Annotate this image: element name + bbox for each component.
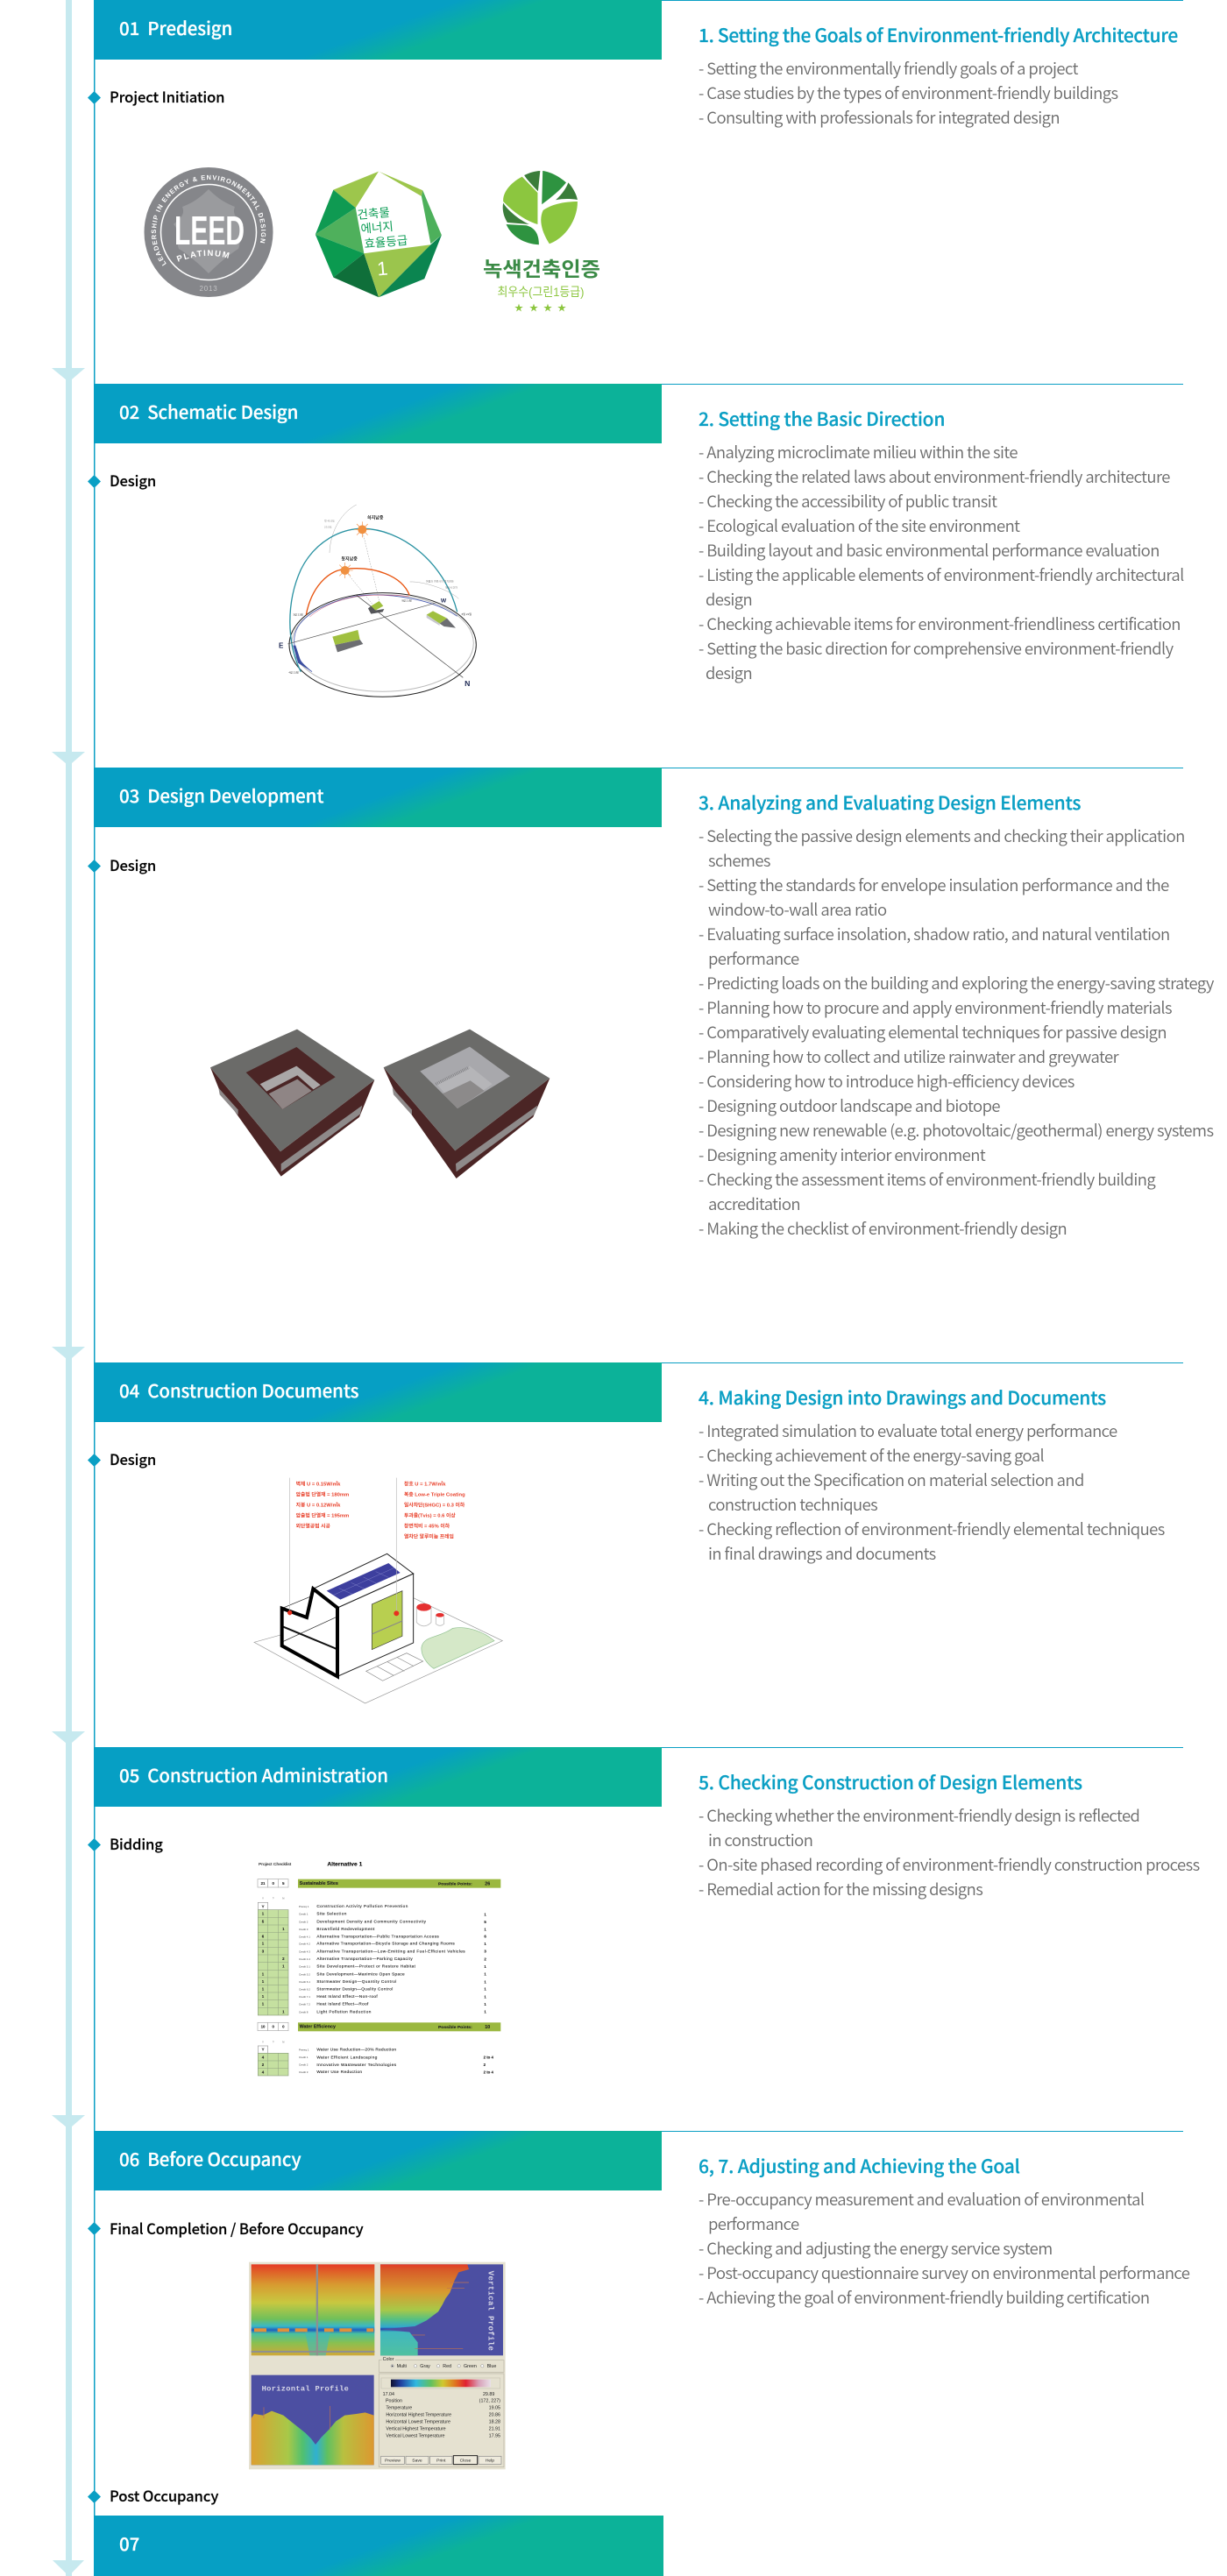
chart: thermal profile analysis screenshot: 20.86 xyxy=(489,2412,500,2417)
text block: step 1 items: - Setting the environmentally friendly goals of a project xyxy=(699,57,1078,80)
label: Bidding: Bidding xyxy=(110,1833,163,1854)
chart: project checklist table: 1 xyxy=(282,2009,285,2013)
icon: building massing models xyxy=(210,1029,550,1178)
chart: project checklist table: Alternative 1 xyxy=(327,1862,363,1868)
header: 02 Schematic Design: 02 Schematic Design xyxy=(119,398,298,424)
chart: thermal profile analysis screenshot: Vertical Lowest Temperature xyxy=(386,2433,444,2438)
header: 05 Construction Administration xyxy=(94,1747,662,1807)
header: 06 Before Occupancy: 06 Before Occupancy xyxy=(119,2145,301,2171)
chart: project checklist table: 10 xyxy=(485,2025,490,2030)
heading: step 2: 2. Setting the Basic Direction xyxy=(699,406,945,432)
chart: project checklist table: 1 xyxy=(484,1972,486,1977)
text block: step 5 items: - Remedial action for the missing designs xyxy=(699,1878,982,1900)
chart: project checklist table: 2 xyxy=(262,2063,265,2067)
icon: LEED Platinum badge: PLATINUM xyxy=(176,250,230,262)
chart: thermal profile analysis screenshot: Print xyxy=(436,2459,446,2464)
chart: project checklist table: 1 xyxy=(262,1994,265,1999)
icon: building energy efficiency grade badge: 에너지 xyxy=(360,220,394,236)
label: Project Initiation: Project Initiation xyxy=(110,86,224,107)
chart: project checklist table: Project Checklist xyxy=(259,1862,292,1867)
chart: thermal profile analysis screenshot: Horizontal Lowest Temperature xyxy=(386,2419,450,2424)
text block: step 3 items: - Checking the assessment items of environment-friendly building xyxy=(699,1168,1155,1191)
chart: house envelope isometric diagram: 창면적비 = 45% 이하 xyxy=(404,1522,450,1529)
chart: project checklist table: Stormwater Design—Quality Control xyxy=(316,1987,393,1992)
chart: project checklist table: 4 xyxy=(262,2070,265,2074)
chart: project checklist table: Credit 4.3 xyxy=(299,1950,310,1953)
text block: step 4 items xyxy=(699,1419,1165,1565)
text block: step 2 items: - Checking the accessibility of public transit xyxy=(699,490,996,513)
text block: step 3 items: - Designing amenity interior environment xyxy=(699,1143,985,1166)
chart: sun path diagram: 동지남중 xyxy=(341,556,358,562)
chart: thermal profile analysis screenshot: Temperature xyxy=(386,2405,412,2410)
chart: project checklist table: 1 xyxy=(484,2009,486,2013)
text block: step 2 items: design xyxy=(706,662,752,684)
text block: step 3 items: - Setting the standards for envelope insulation performance and the xyxy=(699,874,1169,896)
chart: project checklist table: 1 xyxy=(262,1942,265,1946)
text block: step 2 items: design xyxy=(706,588,752,611)
chart: project checklist table: 1 xyxy=(282,1927,285,1931)
text block: steps 6 and 7 items: - Achieving the goal of environment-friendly building certification xyxy=(699,2286,1150,2309)
chart: project checklist table: Alternative Transportation—Parking Capacity xyxy=(316,1957,413,1961)
chart: project checklist table: 2 to 4 xyxy=(484,2055,494,2059)
heading: steps 6 and 7: 6, 7. Adjusting and Achieving the Goal xyxy=(699,2153,1020,2179)
icon: green building certification logo xyxy=(483,171,600,314)
chart: project checklist table: 1 xyxy=(484,1912,486,1916)
text block: step 4 items: - Checking reflection of environment-friendly elemental techniques xyxy=(699,1518,1165,1540)
chart: project checklist table: Credit 1 xyxy=(299,2056,309,2059)
text block: step 3 items: performance xyxy=(708,947,799,970)
heading: step 3: 3. Analyzing and Evaluating Design Elements xyxy=(699,789,1081,816)
chart: thermal profile analysis screenshot: Vertical Highest Temperature xyxy=(386,2426,446,2431)
panel: section 06 Before Occupancy xyxy=(88,2131,1190,2506)
chart: project checklist table: 4 xyxy=(262,2055,265,2059)
chart: project checklist table: 1 xyxy=(484,1979,486,1984)
chart: project checklist table: Y xyxy=(261,1904,265,1908)
chart: house envelope isometric diagram: 압출법 단열재 = 180mm xyxy=(296,1490,349,1497)
chart: project checklist table: Credit 4.1 xyxy=(299,1935,310,1938)
chart: sun path diagram xyxy=(279,505,477,697)
text block: step 4 items: construction techniques xyxy=(708,1493,877,1516)
chart: thermal profile analysis screenshot: Green xyxy=(464,2364,477,2369)
panel: section 05 Construction Administration xyxy=(88,1747,1200,2077)
timeline stripe with arrows xyxy=(52,0,95,2576)
header: 05 Construction Administration: 05 Construction Administration xyxy=(119,1761,388,1787)
chart: project checklist table: 1 xyxy=(262,1912,265,1916)
chart: project checklist table: 10 xyxy=(261,2025,266,2029)
text block: step 3 items: - Comparatively evaluating elemental techniques for passive design xyxy=(699,1021,1167,1044)
text block: steps 6 and 7 items xyxy=(699,2188,1190,2309)
label: Post Occupancy: Post Occupancy xyxy=(110,2485,218,2506)
label: Design: Design xyxy=(110,470,156,491)
text block: step 5 items: in construction xyxy=(708,1829,812,1851)
heading: step 4: 4. Making Design into Drawings and Documents xyxy=(699,1384,1106,1411)
header: 06 Before Occupancy xyxy=(94,2131,662,2190)
text block: steps 6 and 7 items: - Checking and adjusting the energy service system xyxy=(699,2237,1053,2260)
icon: LEED Platinum badge: LEADERSHIP IN ENERGY & ENVIRONMENTAL DESIGN xyxy=(151,175,266,266)
chart: project checklist table: Site Selection xyxy=(316,1912,347,1916)
chart: project checklist table: Heat Island Effect—Roof xyxy=(316,2002,369,2006)
chart: sun path diagram: 일사시간차 xyxy=(445,584,457,589)
text block: step 4 items: - Integrated simulation to evaluate total energy performance xyxy=(699,1419,1117,1442)
header: 03 Design Development xyxy=(94,768,662,827)
chart: project checklist table: Alternative Transportation—Low-Emitting and Fuel-Efficient Vehicles xyxy=(316,1949,465,1953)
icon: green building certification logo: 최우수(그린1등급) xyxy=(498,285,584,299)
header: 04 Construction Documents xyxy=(94,1362,662,1422)
chart: project checklist table: Water Efficiency xyxy=(300,2025,336,2030)
icon: green building certification logo: ★ xyxy=(514,304,523,314)
text block: step 4 items: - Checking achievement of the energy-saving goal xyxy=(699,1444,1044,1467)
text block: steps 6 and 7 items: performance xyxy=(708,2212,799,2235)
icon: diamond marker xyxy=(88,2222,101,2234)
icon: diamond marker xyxy=(88,860,101,873)
chart: project checklist table: Brownfield Redevelopment xyxy=(316,1927,375,1931)
chart: project checklist table: Heat Island Effect—Non-roof xyxy=(316,1994,378,1999)
chart: project checklist table: 1 xyxy=(262,1987,265,1992)
text block: step 4 items: - Writing out the Specification on material selection and xyxy=(699,1468,1084,1491)
chart: house envelope isometric diagram: 열차단 알루미늄 프레임 xyxy=(404,1532,454,1539)
chart: thermal profile analysis screenshot: Close xyxy=(460,2459,472,2464)
chart: thermal profile analysis screenshot: Horizontal Highest Temperature xyxy=(386,2412,451,2417)
chart: project checklist table: Credit 5.1 xyxy=(299,1965,310,1969)
icon: diamond marker xyxy=(88,91,101,103)
header: 02 Schematic Design xyxy=(94,384,662,443)
chart: thermal profile analysis screenshot: 29.89 xyxy=(483,2392,494,2397)
text block: step 2 items: - Analyzing microclimate milieu within the site xyxy=(699,441,1018,464)
icon: diamond marker xyxy=(88,475,101,487)
icon: building energy efficiency grade badge: 건축물 xyxy=(357,206,390,222)
chart: project checklist table: Credit 6.1 xyxy=(299,1980,310,1984)
label: Design: Design xyxy=(110,1448,156,1469)
label: Final Completion / Before Occupancy: Final Completion / Before Occupancy xyxy=(110,2218,364,2239)
icon: LEED Platinum badge: LEED xyxy=(174,208,245,253)
chart: project checklist table: Development Density and Community Connectivity xyxy=(316,1919,427,1923)
chart: sun path diagram: 여름과 겨울사이 위치변화 xyxy=(426,579,454,584)
text block: step 5 items: - On-site phased recording of environment-friendly construction process xyxy=(699,1853,1200,1876)
chart: thermal profile analysis screenshot: Blue xyxy=(487,2364,496,2369)
header: 01 Predesign: 01 Predesign xyxy=(119,14,232,40)
chart: thermal profile analysis screenshot: Position xyxy=(386,2398,402,2403)
panel: section 04 Construction Documents xyxy=(88,1362,1183,1703)
heading: step 1: 1. Setting the Goals of Environment-friendly Architecture xyxy=(699,22,1178,48)
text block: step 2 items: - Ecological evaluation of the site environment xyxy=(699,514,1019,537)
chart: thermal profile analysis screenshot: 18.28 xyxy=(489,2419,500,2424)
chart: project checklist table: 1 xyxy=(484,1942,486,1946)
icon: building energy efficiency grade badge: 효율등급 xyxy=(364,234,408,251)
chart: thermal profile analysis screenshot: Multi xyxy=(397,2364,407,2369)
chart: project checklist table: 1 xyxy=(484,1987,486,1992)
chart: project checklist table: Y xyxy=(262,1897,264,1900)
chart: sun path diagram: 4월 21일 xyxy=(288,670,299,675)
chart: project checklist table: Water Use Reduction xyxy=(316,2070,362,2074)
text block: step 2 items: - Checking the related laws about environment-friendly architecture xyxy=(699,465,1170,488)
icon: building energy efficiency grade badge: 1 xyxy=(376,258,389,280)
chart: sun path diagram: 하지남중 xyxy=(367,515,384,521)
chart: project checklist table: Y xyxy=(261,2048,265,2052)
chart: project checklist table: 5 xyxy=(282,1881,285,1886)
chart: project checklist table: Prereq 1 xyxy=(299,2048,309,2051)
icon: green building certification logo: ★ xyxy=(543,304,552,314)
icon: building energy efficiency grade badge xyxy=(316,172,442,298)
text block: step 3 items: schemes xyxy=(708,849,770,872)
text block: step 2 items: - Building layout and basic environmental performance evaluation xyxy=(699,539,1160,562)
chart: project checklist table: 1 xyxy=(282,1964,285,1969)
chart: sun path diagram: N xyxy=(465,679,470,688)
chart: thermal profile analysis screenshot xyxy=(249,2262,506,2469)
chart: project checklist table: N xyxy=(282,2040,284,2043)
chart: house envelope isometric diagram: 지붕 U = 0.12W/㎡k xyxy=(296,1501,341,1508)
text block: step 3 items: - Evaluating surface insolation, shadow ratio, and natural ventilation xyxy=(699,923,1170,945)
chart: project checklist table: Sustainable Sites xyxy=(300,1881,338,1886)
icon: green building certification logo: ★ xyxy=(529,304,538,314)
chart: project checklist table: 0 xyxy=(272,2025,274,2029)
text block: step 3 items: - Designing outdoor landscape and biotope xyxy=(699,1094,1000,1117)
chart: project checklist table: 1 xyxy=(262,2002,265,2006)
chart: project checklist table: Possible Points: xyxy=(438,2025,472,2030)
chart: project checklist table: Credit 5.2 xyxy=(299,1972,310,1976)
chart: house envelope isometric diagram xyxy=(253,1477,503,1703)
text block: step 3 items: - Planning how to collect and utilize rainwater and greywater xyxy=(699,1045,1118,1068)
chart: project checklist table: N xyxy=(282,1897,284,1900)
chart: project checklist table: 0 xyxy=(272,1881,274,1886)
chart: thermal profile analysis screenshot: 17.04 xyxy=(383,2392,394,2397)
text block: step 3 items: - Considering how to introduce high-efficiency devices xyxy=(699,1070,1075,1093)
chart: project checklist table: Credit 6.2 xyxy=(299,1988,310,1992)
text block: step 1 items: - Case studies by the types of environment-friendly buildings xyxy=(699,81,1118,104)
chart: project checklist table: Credit 7.2 xyxy=(299,2003,310,2006)
text block: step 2 items: - Listing the applicable elements of environment-friendly architectural xyxy=(699,563,1184,586)
chart: house envelope isometric diagram: 복층 Low-e Triple Coating xyxy=(404,1490,465,1497)
chart: project checklist table: 5 xyxy=(484,1920,486,1924)
text block: step 3 items: accreditation xyxy=(708,1192,800,1215)
text block: step 5 items: - Checking whether the environment-friendly design is reflected xyxy=(699,1804,1139,1827)
chart: project checklist table: Credit 2 xyxy=(299,1920,309,1923)
text block: step 3 items: window-to-wall area ratio xyxy=(708,898,887,921)
text block: step 3 items: - Designing new renewable (e.g. photovoltaic/geothermal) energy systems xyxy=(699,1119,1213,1142)
chart: house envelope isometric diagram: 압출법 단열재 = 195mm xyxy=(296,1511,349,1518)
chart: sun path diagram: 9월 21일 xyxy=(401,598,412,603)
chart: house envelope isometric diagram: 창호 U = 1.7W/㎡k xyxy=(404,1480,446,1487)
text block: step 2 items xyxy=(699,441,1184,684)
text block: steps 6 and 7 items: - Pre-occupancy measurement and evaluation of environmental xyxy=(699,2188,1144,2211)
chart: thermal profile analysis screenshot: Horizontal Profile xyxy=(262,2385,349,2394)
chart: project checklist table: 0 xyxy=(282,2025,285,2029)
chart: project checklist table: Credit 7.1 xyxy=(299,1995,310,1999)
chart: project checklist table: Credit 3 xyxy=(299,1928,309,1931)
chart: project checklist table: Alternative Transportation—Public Transportation Access xyxy=(316,1934,439,1938)
chart: project checklist table xyxy=(258,1862,501,2077)
header: 03 Design Development: 03 Design Development xyxy=(119,782,323,808)
chart: thermal profile analysis screenshot: Help xyxy=(486,2459,494,2464)
text block: step 3 items: - Making the checklist of environment-friendly design xyxy=(699,1217,1067,1240)
heading: step 5: 5. Checking Construction of Design Elements xyxy=(699,1769,1082,1795)
chart: sun path diagram: 6월 21일 xyxy=(462,612,472,616)
chart: project checklist table: ? xyxy=(273,1897,274,1900)
chart: project checklist table: Credit 8 xyxy=(299,2010,309,2013)
text block: step 3 items: - Planning how to procure and apply environment-friendly materials xyxy=(699,996,1172,1019)
text block: step 4 items: in final drawings and documents xyxy=(708,1542,936,1565)
chart: thermal profile analysis screenshot: 21.91 xyxy=(489,2426,500,2431)
text block: step 1 items: - Consulting with professionals for integrated design xyxy=(699,106,1060,129)
chart: project checklist table: Credit 4.4 xyxy=(299,1957,310,1961)
chart: sun path diagram: E xyxy=(279,642,284,650)
chart: project checklist table: 1 xyxy=(484,1964,486,1969)
chart: house envelope isometric diagram: 벽체 U = 0.15W/㎡k xyxy=(296,1480,341,1487)
chart: project checklist table: 1 xyxy=(262,1971,265,1976)
chart: thermal profile analysis screenshot: (172, 227) xyxy=(479,2398,500,2403)
text block: step 3 items: - Predicting loads on the building and exploring the energy-saving strategy xyxy=(699,972,1214,994)
icon: green building certification logo: ★ xyxy=(557,304,566,314)
chart: project checklist table: 1 xyxy=(262,1979,265,1984)
chart: project checklist table: Site Development—Protect or Restore Habitat xyxy=(316,1964,416,1969)
chart: project checklist table: 1 xyxy=(484,1994,486,1999)
chart: project checklist table: Construction Activity Pollution Prevention xyxy=(316,1904,408,1908)
header: 04 Construction Documents: 04 Construction Documents xyxy=(119,1376,358,1403)
chart: thermal profile analysis screenshot: Vertical Profile xyxy=(486,2271,494,2351)
panel: section 03 Design Development xyxy=(88,768,1214,1240)
header: 07: 07 xyxy=(119,2530,139,2556)
chart: project checklist table: Site Development—Maximize Open Space xyxy=(316,1971,405,1976)
chart: project checklist table: 6 xyxy=(262,1934,265,1938)
icon: diamond marker xyxy=(88,1838,101,1851)
chart: project checklist table: 5 xyxy=(262,1919,265,1923)
chart: thermal profile analysis screenshot: Color xyxy=(383,2357,394,2362)
chart: project checklist table: Alternative Transportation—Bicycle Storage and Changing Rooms xyxy=(316,1942,455,1946)
chart: project checklist table: Credit 4.2 xyxy=(299,1943,310,1946)
icon: diamond marker post occupancy xyxy=(88,2490,101,2502)
chart: sun path diagram: 23.5도 xyxy=(324,525,332,528)
icon: green building certification logo: 녹색건축인증 xyxy=(483,258,600,280)
text block: step 3 items: - Selecting the passive design elements and checking their application xyxy=(699,824,1185,847)
chart: project checklist table: Water Use Reduction—20% Reduction xyxy=(316,2047,396,2051)
chart: sun path diagram: 3월 21일 xyxy=(293,612,303,616)
chart: project checklist table: Credit 3 xyxy=(299,2070,309,2074)
chart: project checklist table: 1 xyxy=(484,2002,486,2006)
chart: project checklist table: 26 xyxy=(485,1881,490,1886)
text block: step 1 items xyxy=(699,57,1118,129)
icon: LEED Platinum badge xyxy=(144,167,273,297)
chart: project checklist table: Y xyxy=(262,2040,264,2043)
chart: project checklist table: Light Pollution Reduction xyxy=(316,2009,372,2013)
chart: project checklist table: 2 xyxy=(484,2063,486,2067)
header: 01 Predesign xyxy=(94,0,662,60)
chart: project checklist table: Water Efficient Landscaping xyxy=(316,2055,378,2059)
chart: house envelope isometric diagram: 일사차단(SHGC) = 0.3 이하 xyxy=(404,1501,465,1508)
chart: project checklist table: Stormwater Design—Quantity Control xyxy=(316,1979,396,1984)
chart: project checklist table: Prereq 1 xyxy=(299,1905,309,1908)
chart: thermal profile analysis screenshot: Save xyxy=(412,2459,422,2464)
text block: step 3 items xyxy=(699,824,1214,1240)
chart: project checklist table: 2 xyxy=(282,1957,285,1961)
chart: house envelope isometric diagram: 투과율(Tvis) = 0.6 이상 xyxy=(404,1511,456,1518)
chart: sun path diagram: W xyxy=(441,598,447,605)
label: Design: Design xyxy=(110,854,156,875)
text block: step 2 items: - Setting the basic direction for comprehensive environment-friendly xyxy=(699,637,1173,660)
chart: project checklist table: 21 xyxy=(261,1881,266,1886)
chart: project checklist table: 2 to 4 xyxy=(484,2070,494,2074)
chart: thermal profile analysis screenshot: 17.95 xyxy=(489,2433,500,2438)
chart: project checklist table: 2 xyxy=(484,1957,486,1961)
chart: thermal profile analysis screenshot: 19.05 xyxy=(489,2405,500,2410)
text block: steps 6 and 7 items: - Post-occupancy questionnaire survey on environmental performance xyxy=(699,2261,1189,2284)
chart: house envelope isometric diagram: 외단열공법 시공 xyxy=(296,1522,330,1529)
chart: project checklist table: 6 xyxy=(484,1935,486,1939)
panel: section 01 Predesign xyxy=(88,0,1183,314)
icon: LEED Platinum badge: 2013 xyxy=(200,285,217,293)
chart: thermal profile analysis screenshot: Gray xyxy=(420,2364,430,2369)
panel: section 02 Schematic Design xyxy=(88,384,1184,697)
header: 07 xyxy=(94,2516,663,2576)
chart: project checklist table: Credit 2 xyxy=(299,2063,309,2067)
text block: step 5 items xyxy=(699,1804,1200,1900)
chart: project checklist table: Innovative Wastewater Technologies xyxy=(316,2063,397,2067)
chart: thermal profile analysis screenshot: Red xyxy=(443,2364,451,2369)
chart: project checklist table: Possible Points: xyxy=(438,1881,472,1886)
chart: sun path diagram: 약 45.5도 xyxy=(324,519,335,523)
chart: project checklist table: ? xyxy=(273,2040,274,2043)
chart: project checklist table: 3 xyxy=(262,1949,265,1953)
chart: thermal profile analysis screenshot: Preview xyxy=(385,2459,401,2464)
chart: project checklist table: 1 xyxy=(484,1927,486,1931)
icon: diamond marker xyxy=(88,1454,101,1467)
text block: step 2 items: - Checking achievable items for environment-friendliness certification xyxy=(699,612,1181,635)
chart: project checklist table: Credit 1 xyxy=(299,1913,309,1916)
chart: project checklist table: 3 xyxy=(484,1950,486,1954)
